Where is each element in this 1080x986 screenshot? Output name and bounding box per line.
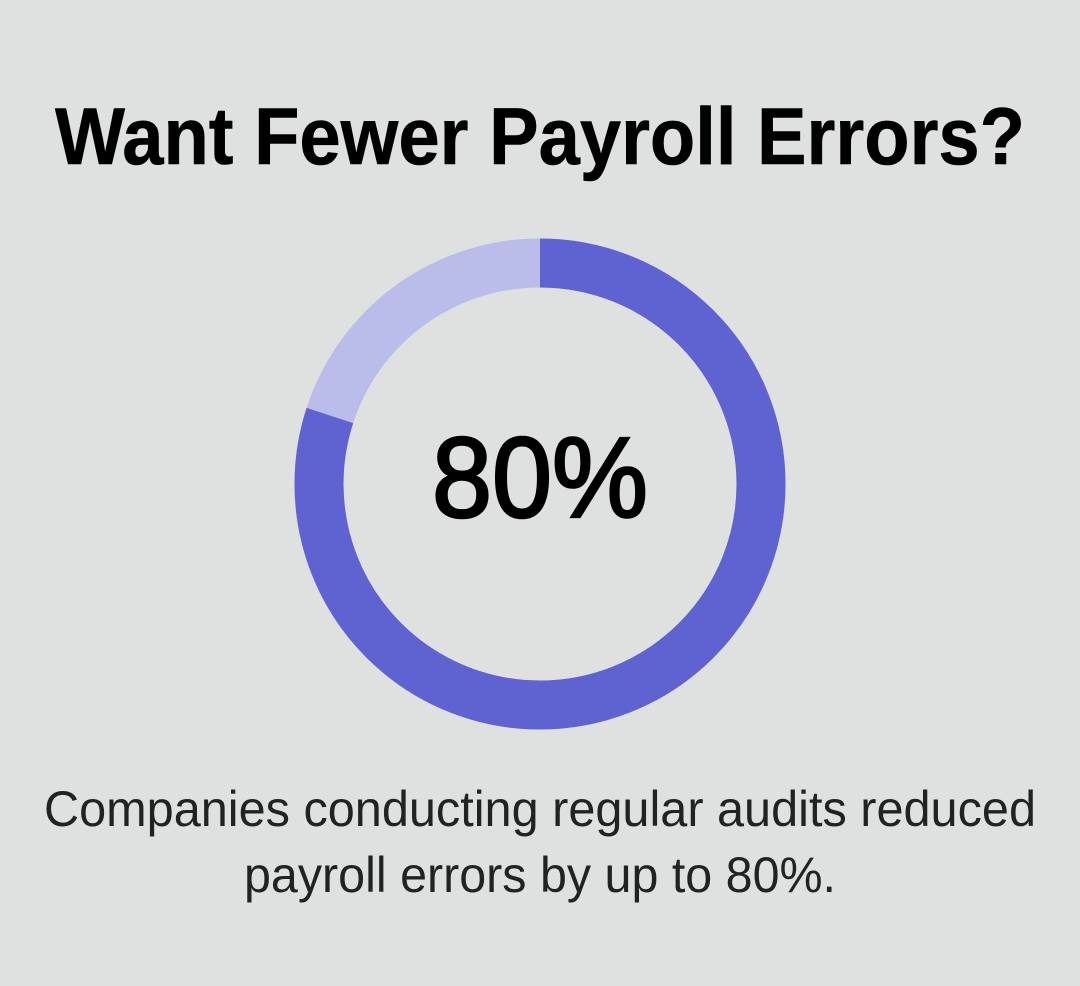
donut chart: 80% bbox=[319, 263, 761, 705]
donut value segment bbox=[319, 263, 761, 705]
donut remainder segment bbox=[319, 263, 761, 705]
description text bbox=[44, 781, 1036, 903]
description text: Companies conducting regular audits reduced bbox=[44, 781, 1036, 837]
description text: payroll errors by up to 80%. bbox=[244, 847, 836, 903]
center value: 80% bbox=[432, 415, 648, 542]
